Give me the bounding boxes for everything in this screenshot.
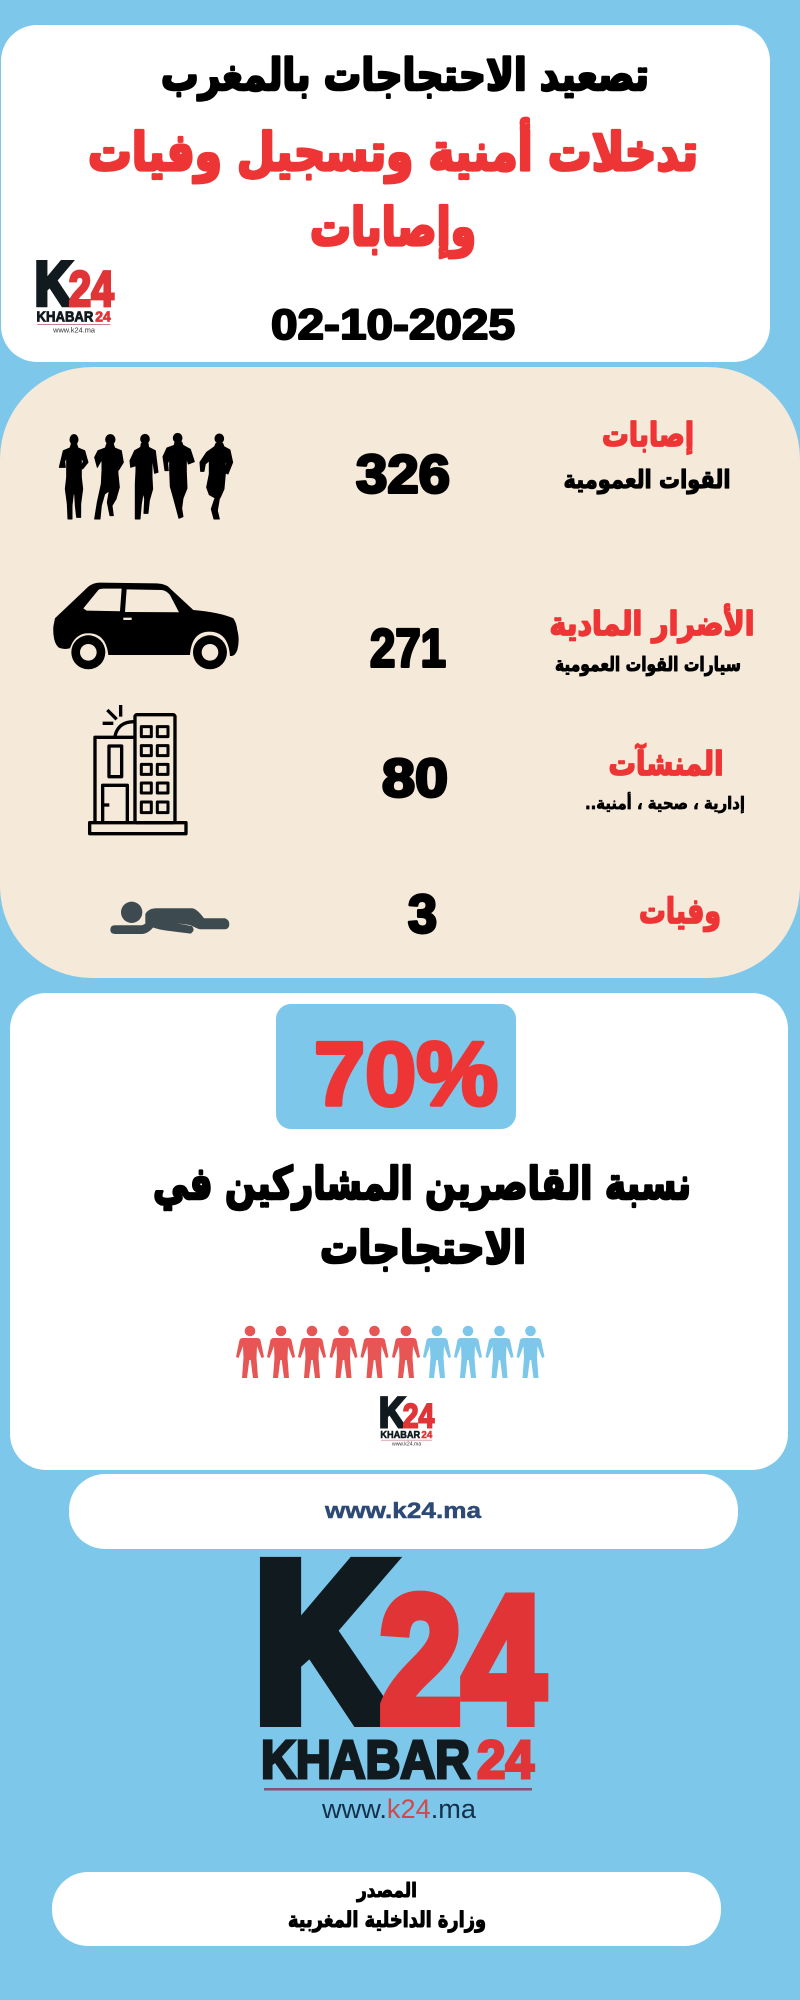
logo: small K24 header: 24 xyxy=(95,309,111,325)
icon: person lying down xyxy=(110,902,229,934)
chart: ten people pictogram xyxy=(236,1326,544,1378)
label: facilities: المنشآت xyxy=(608,743,724,783)
callout: 70 percent: 70% xyxy=(314,1025,498,1125)
logo: small K24 panel: www.k24.ma xyxy=(392,1442,421,1448)
panel: minors percentage xyxy=(10,993,788,1470)
stat number: injuries: 326 xyxy=(356,444,450,504)
icon: five runners xyxy=(59,433,233,519)
date: 02-10-2025 xyxy=(271,301,515,349)
sublabel: public forces vehicles: سيارات القوات العمومية xyxy=(555,652,741,676)
icon: building xyxy=(90,705,186,834)
stat number: material damage: 271 xyxy=(370,618,446,678)
stat number: facilities: 80 xyxy=(382,748,448,808)
source label: المصدر xyxy=(356,1878,417,1902)
icon: car xyxy=(53,583,239,669)
logo: small K24 panel: 24 xyxy=(421,1430,433,1441)
label: injuries: إصابات xyxy=(602,415,694,455)
panel: statistics xyxy=(0,367,800,978)
logo: small K24 panel: KHABAR xyxy=(380,1430,421,1441)
sublabel: public forces: القوات العمومية xyxy=(564,465,730,495)
logo: small K24 header: 24 xyxy=(69,260,114,317)
logo: small K24 panel: K xyxy=(379,1389,405,1437)
panel: title header xyxy=(1,25,770,362)
logo: large K24 Khabar 24: K xyxy=(254,1517,392,1767)
logo: small K24 panel: 24 xyxy=(403,1397,434,1435)
heading: minors share line 2: الاحتجاجات xyxy=(320,1221,526,1274)
panel: source pill xyxy=(52,1872,721,1946)
logo: large K24 Khabar 24 xyxy=(254,1517,545,1824)
logo: small K24 header: www.k24.ma xyxy=(52,325,96,335)
title: red heading line 2: وإصابات xyxy=(310,198,476,258)
logo: large K24 Khabar 24: 24 xyxy=(379,1559,545,1761)
sublabel: facility types: إدارية ، صحية ، أمنية.. xyxy=(585,792,745,814)
logo: small K24 panel xyxy=(379,1389,434,1448)
logo: small K24 header xyxy=(35,249,114,335)
stat number: deaths: 3 xyxy=(408,884,437,944)
label: deaths: وفيات xyxy=(639,892,721,932)
source: interior ministry: وزارة الداخلية المغربية xyxy=(288,1908,486,1933)
logo: large K24 Khabar 24: 24 xyxy=(477,1730,534,1790)
title: red heading line 1: تدخلات أمنية وتسجيل وفيات xyxy=(88,118,698,183)
logo: large K24 Khabar 24: KHABAR xyxy=(261,1730,470,1790)
panel: website pill xyxy=(69,1474,738,1549)
website url: www.k24.ma xyxy=(324,1498,482,1523)
label: material damage: الأضرار المادية xyxy=(550,603,754,644)
title: black heading: تصعيد الاحتجاجات بالمغرب xyxy=(161,50,649,101)
logo: small K24 header: K xyxy=(35,249,72,319)
callout: 70 percent xyxy=(276,1004,516,1129)
logo: large K24 Khabar 24: www.k24.ma xyxy=(321,1794,477,1824)
logo: small K24 header: KHABAR xyxy=(37,309,94,325)
